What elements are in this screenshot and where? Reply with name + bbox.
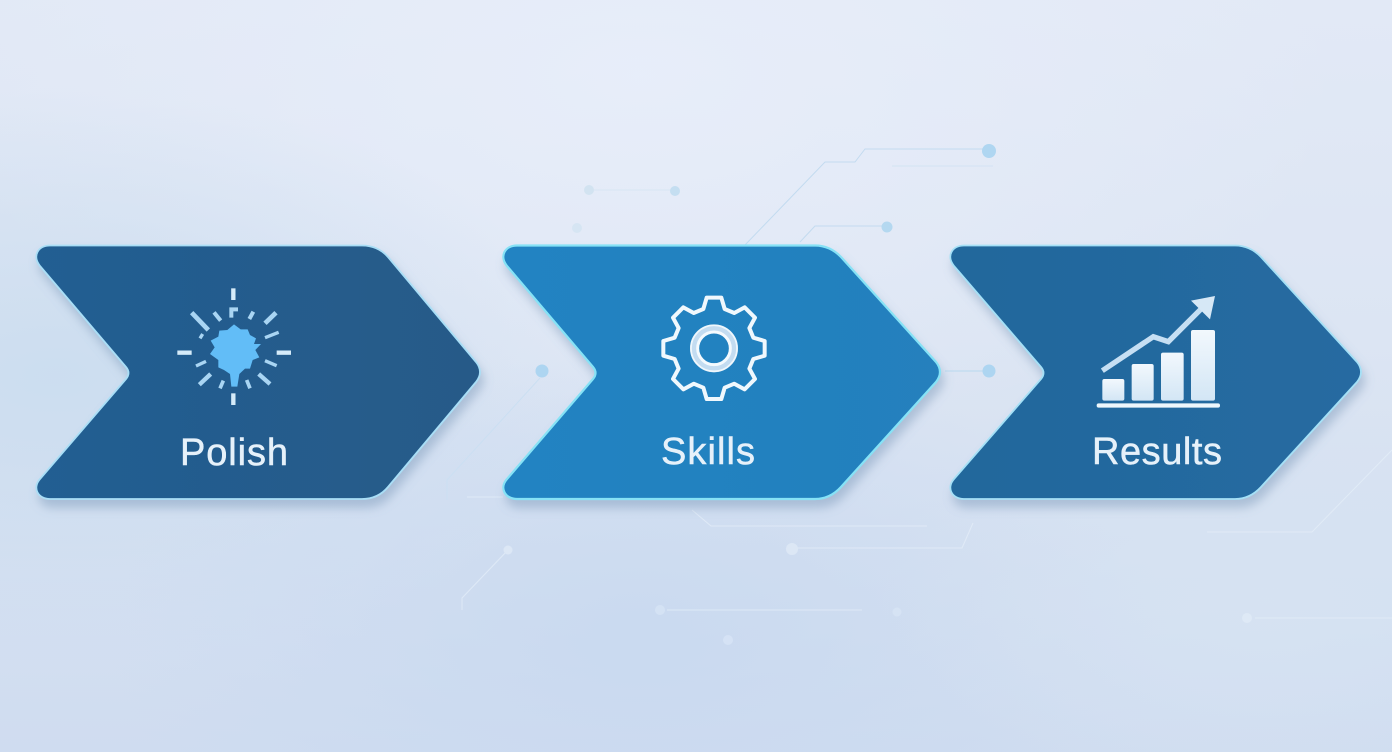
circuit lines: lower <box>462 450 1392 645</box>
chevron shape: Results <box>950 246 1361 499</box>
bars <box>1102 330 1215 401</box>
label: Results: Results <box>1092 431 1222 473</box>
label: Polish: Polish <box>180 432 288 474</box>
label: Skills: Skills <box>661 431 755 473</box>
chevron: Results <box>950 246 1361 499</box>
circuit lines: connectors <box>447 364 996 500</box>
baseline <box>1097 403 1220 408</box>
chevron shape: Skills <box>503 246 940 499</box>
trend arrow <box>1102 296 1215 371</box>
chevron: Polish <box>36 246 480 499</box>
icon: bar chart with arrow <box>1097 296 1220 408</box>
icon: polish burst <box>177 288 291 405</box>
icon: gear <box>663 298 765 399</box>
chevron shape: Polish <box>36 246 480 499</box>
circuit lines: upper <box>572 144 996 245</box>
chevron: Skills <box>503 246 940 499</box>
